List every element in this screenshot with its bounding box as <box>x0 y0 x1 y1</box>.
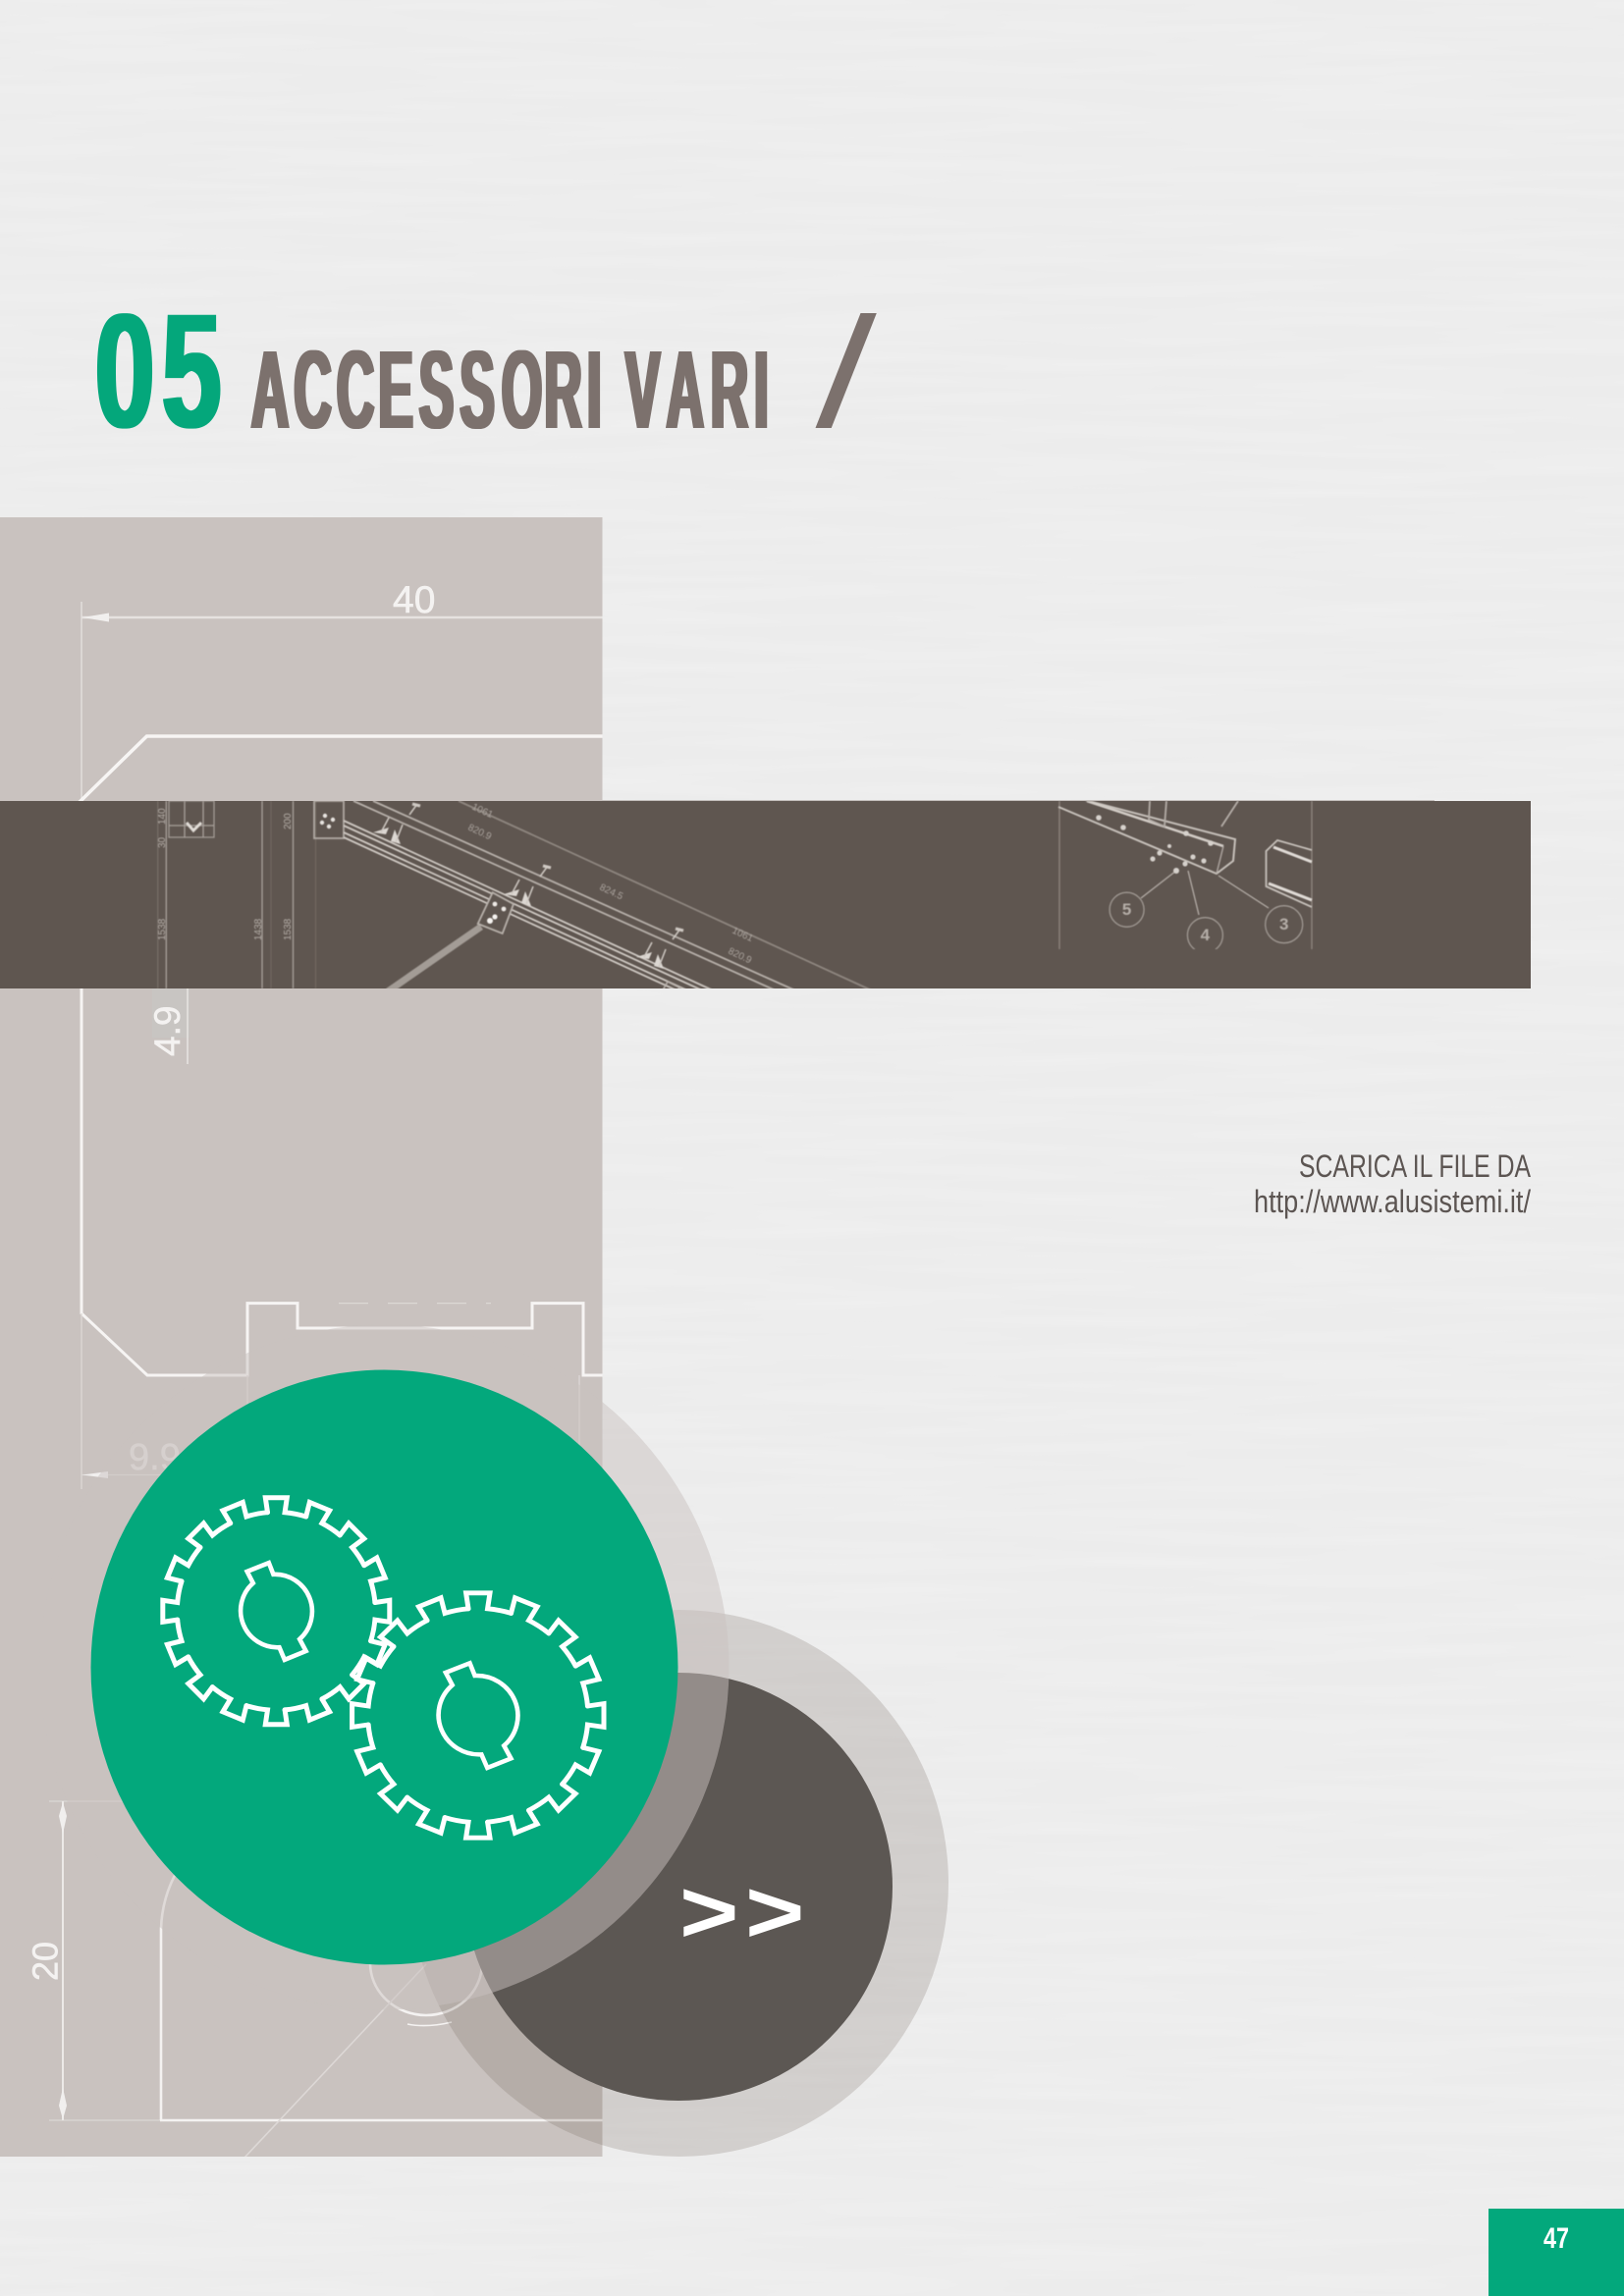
drawing: rotated measures: 140 <box>157 808 168 825</box>
icon: gears <box>160 1495 607 1841</box>
dimension 9.9: 9.9 <box>129 1437 181 1478</box>
page number: 47 <box>1543 2222 1569 2255</box>
drawing: right detail: 3 <box>1279 915 1288 934</box>
gear right <box>349 1590 607 1841</box>
drawing: rotated measures: 1538 <box>157 918 168 940</box>
drawing: vertical dimensions <box>158 801 344 988</box>
double chevron: >> <box>679 1862 804 1961</box>
dimension 20: 20 <box>26 1942 66 1981</box>
profile outline bottom <box>160 1865 603 2158</box>
dimension 40 <box>81 579 603 801</box>
drawing: right detail: 5 <box>1122 900 1131 919</box>
drawing: rotated measures: 1438 <box>253 918 264 940</box>
thin construction lines <box>49 1304 579 2120</box>
drawing: diagonal beam <box>344 801 870 988</box>
profile outline middle <box>81 988 603 1375</box>
drawing: right detail: 4 <box>1201 926 1211 944</box>
outer ring around dark circle <box>410 1610 948 2157</box>
dimension 4.9: 4.9 <box>147 1006 188 1056</box>
page number tab <box>1489 2209 1624 2296</box>
drawing: beam measures: 820.9 <box>466 823 493 842</box>
dark circle <box>464 1673 893 2101</box>
halo around green circle <box>39 1325 729 2010</box>
drawing: second joint plate <box>662 981 680 988</box>
drawing: brackets <box>373 804 683 969</box>
download text <box>1254 1148 1532 1219</box>
green circle <box>90 1370 677 1965</box>
drawing: rotated measures: 200 <box>283 813 294 829</box>
heading: ACCESSORI VARI: ACCESSORI VARI <box>251 328 769 452</box>
drawing: right detail <box>1058 793 1312 953</box>
download text: SCARICA IL FILE DA <box>1299 1148 1532 1184</box>
drawing: beam measures: 824.5 <box>598 882 624 902</box>
drawing: beam measures <box>466 802 755 966</box>
band top hairline <box>602 799 1435 801</box>
dimension 4.9 <box>153 988 189 1064</box>
heading: section number 05: 05 <box>95 280 222 461</box>
drawing: rotated measures: 30 <box>157 836 168 848</box>
drawing: beam measures: 820.9 <box>727 946 753 966</box>
drawing: rotated measures <box>157 808 294 940</box>
heading slash <box>815 313 877 428</box>
panel: technical drawing background <box>0 517 603 2158</box>
panel: dark band with stair drawing <box>0 801 1531 988</box>
dimension 9.9 <box>84 1443 179 1478</box>
profile outline top <box>79 736 603 803</box>
download text: http://www.alusistemi.it/ <box>1254 1184 1531 1219</box>
drawing: beam measures: 1061 <box>470 802 495 821</box>
drawing: square plate dots <box>320 814 335 828</box>
stair drawing artwork <box>157 801 1314 988</box>
drawing: joint plate <box>478 892 514 934</box>
gear left <box>160 1495 393 1728</box>
drawing: strut <box>388 927 481 991</box>
drawing: rotated measures: 1538 <box>283 918 294 940</box>
drawing: beam measures: 1061 <box>731 926 755 944</box>
dimension 20 <box>31 1801 67 2120</box>
dimension 40: 40 <box>393 579 435 621</box>
